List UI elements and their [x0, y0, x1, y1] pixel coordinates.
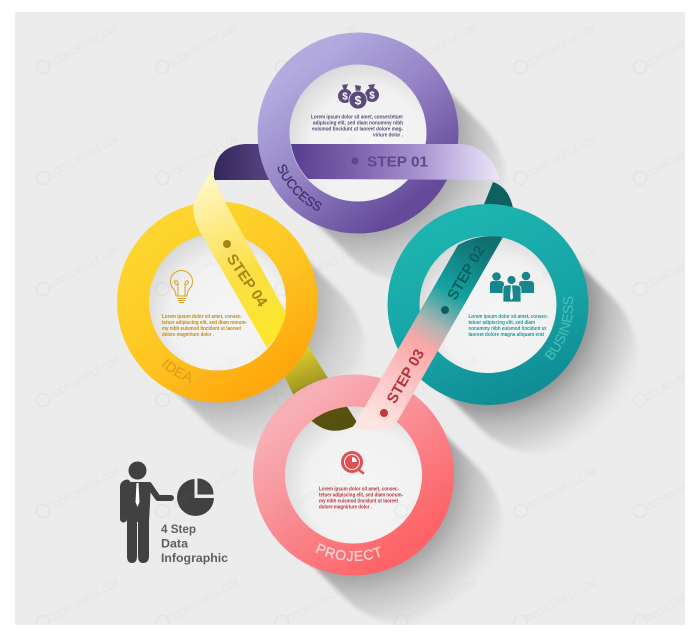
text: step 01 body: euismod tincidunt ut laoreet dolore mag-	[312, 126, 403, 132]
ring openings	[148, 63, 558, 545]
text: step 03 body	[319, 486, 403, 510]
icon: light bulb	[170, 270, 192, 302]
text: step 02 body: laoreet dolore magna aliquam erat	[468, 332, 544, 338]
ring label: success: SUCCESS	[278, 164, 322, 211]
ring label: idea: IDEA	[162, 358, 190, 382]
title: 4 step data infographic: 4 Step	[161, 522, 196, 536]
ribbon: yellow step 04	[193, 168, 286, 348]
text: step 01 body: Lorem ipsum dolor sit amet, consectetuer	[311, 114, 403, 120]
ring label: business: BUSINESS	[544, 296, 573, 360]
text: step 04 body: Lorem ipsum dolor sit amet, consec-	[162, 314, 242, 320]
icon: business team	[490, 272, 534, 302]
text: step 03 body: Lorem ipsum dolor sit amet, consec-	[319, 486, 399, 492]
text: step 03 body: dolore magniriure dolor .	[319, 504, 373, 510]
icon: money bags	[338, 84, 379, 109]
ribbon: olive back section	[285, 340, 358, 431]
icon: magnifier with chart	[341, 451, 363, 473]
ring: business	[404, 220, 572, 389]
ring label: project: PROJECT	[316, 543, 380, 562]
text: step 02 body	[468, 314, 548, 338]
ring: idea	[133, 218, 302, 386]
text: step 02 body: tetuer adipiscing elit, sed diam	[468, 320, 536, 326]
step 01 label: STEP 01	[367, 154, 428, 170]
text: step 01 body: viriure dolor .	[373, 132, 404, 138]
text: step 04 body	[162, 314, 247, 338]
text: step 02 body: Lorem ipsum dolor sit amet, consec-	[468, 314, 548, 320]
icon: money bags: $	[369, 90, 375, 102]
text: step 04 body: my nibh euismod tincidunt ut laoreet	[162, 326, 241, 332]
ribbon: purple step 01	[291, 144, 500, 180]
text: step 02 body: nonummy nibh euismod tincidunt ut	[468, 326, 546, 332]
text: step 01 body: adipiscing elit, sed diam nonummy nibh	[313, 120, 403, 126]
ribbon: dark teal back section	[480, 182, 514, 214]
text: step 04 body: dolore magniriure dolor .	[162, 332, 215, 338]
icon: money bags: $	[342, 92, 348, 102]
text: step 03 body: my nibh euismod tincidunt ut laoreet	[319, 498, 398, 504]
ribbon: dark purple back section	[214, 144, 275, 180]
step 02 label: STEP 02	[444, 243, 489, 303]
icon: money bags: $	[355, 94, 362, 108]
text: step 03 body: tetuer adipiscing elit, sed diam nonum-	[319, 492, 403, 498]
title: 4 step data infographic: Infographic	[161, 551, 228, 565]
step 04 label: STEP 04	[223, 251, 271, 311]
title: 4 step data infographic: Data	[161, 536, 188, 550]
icon: presenter with pie chart	[124, 462, 214, 563]
title: 4 step data infographic	[161, 522, 228, 565]
long shadows behind rings	[218, 133, 545, 532]
text: step 01 body	[311, 114, 404, 138]
ribbon: teal to pink steps 02 and 03	[352, 236, 503, 430]
ring: success	[274, 48, 442, 218]
ring: project	[269, 390, 438, 560]
text: step 04 body: tetuer adipiscing elit, sed diam nonum-	[162, 320, 247, 326]
step 03 label: STEP 03	[384, 346, 428, 407]
